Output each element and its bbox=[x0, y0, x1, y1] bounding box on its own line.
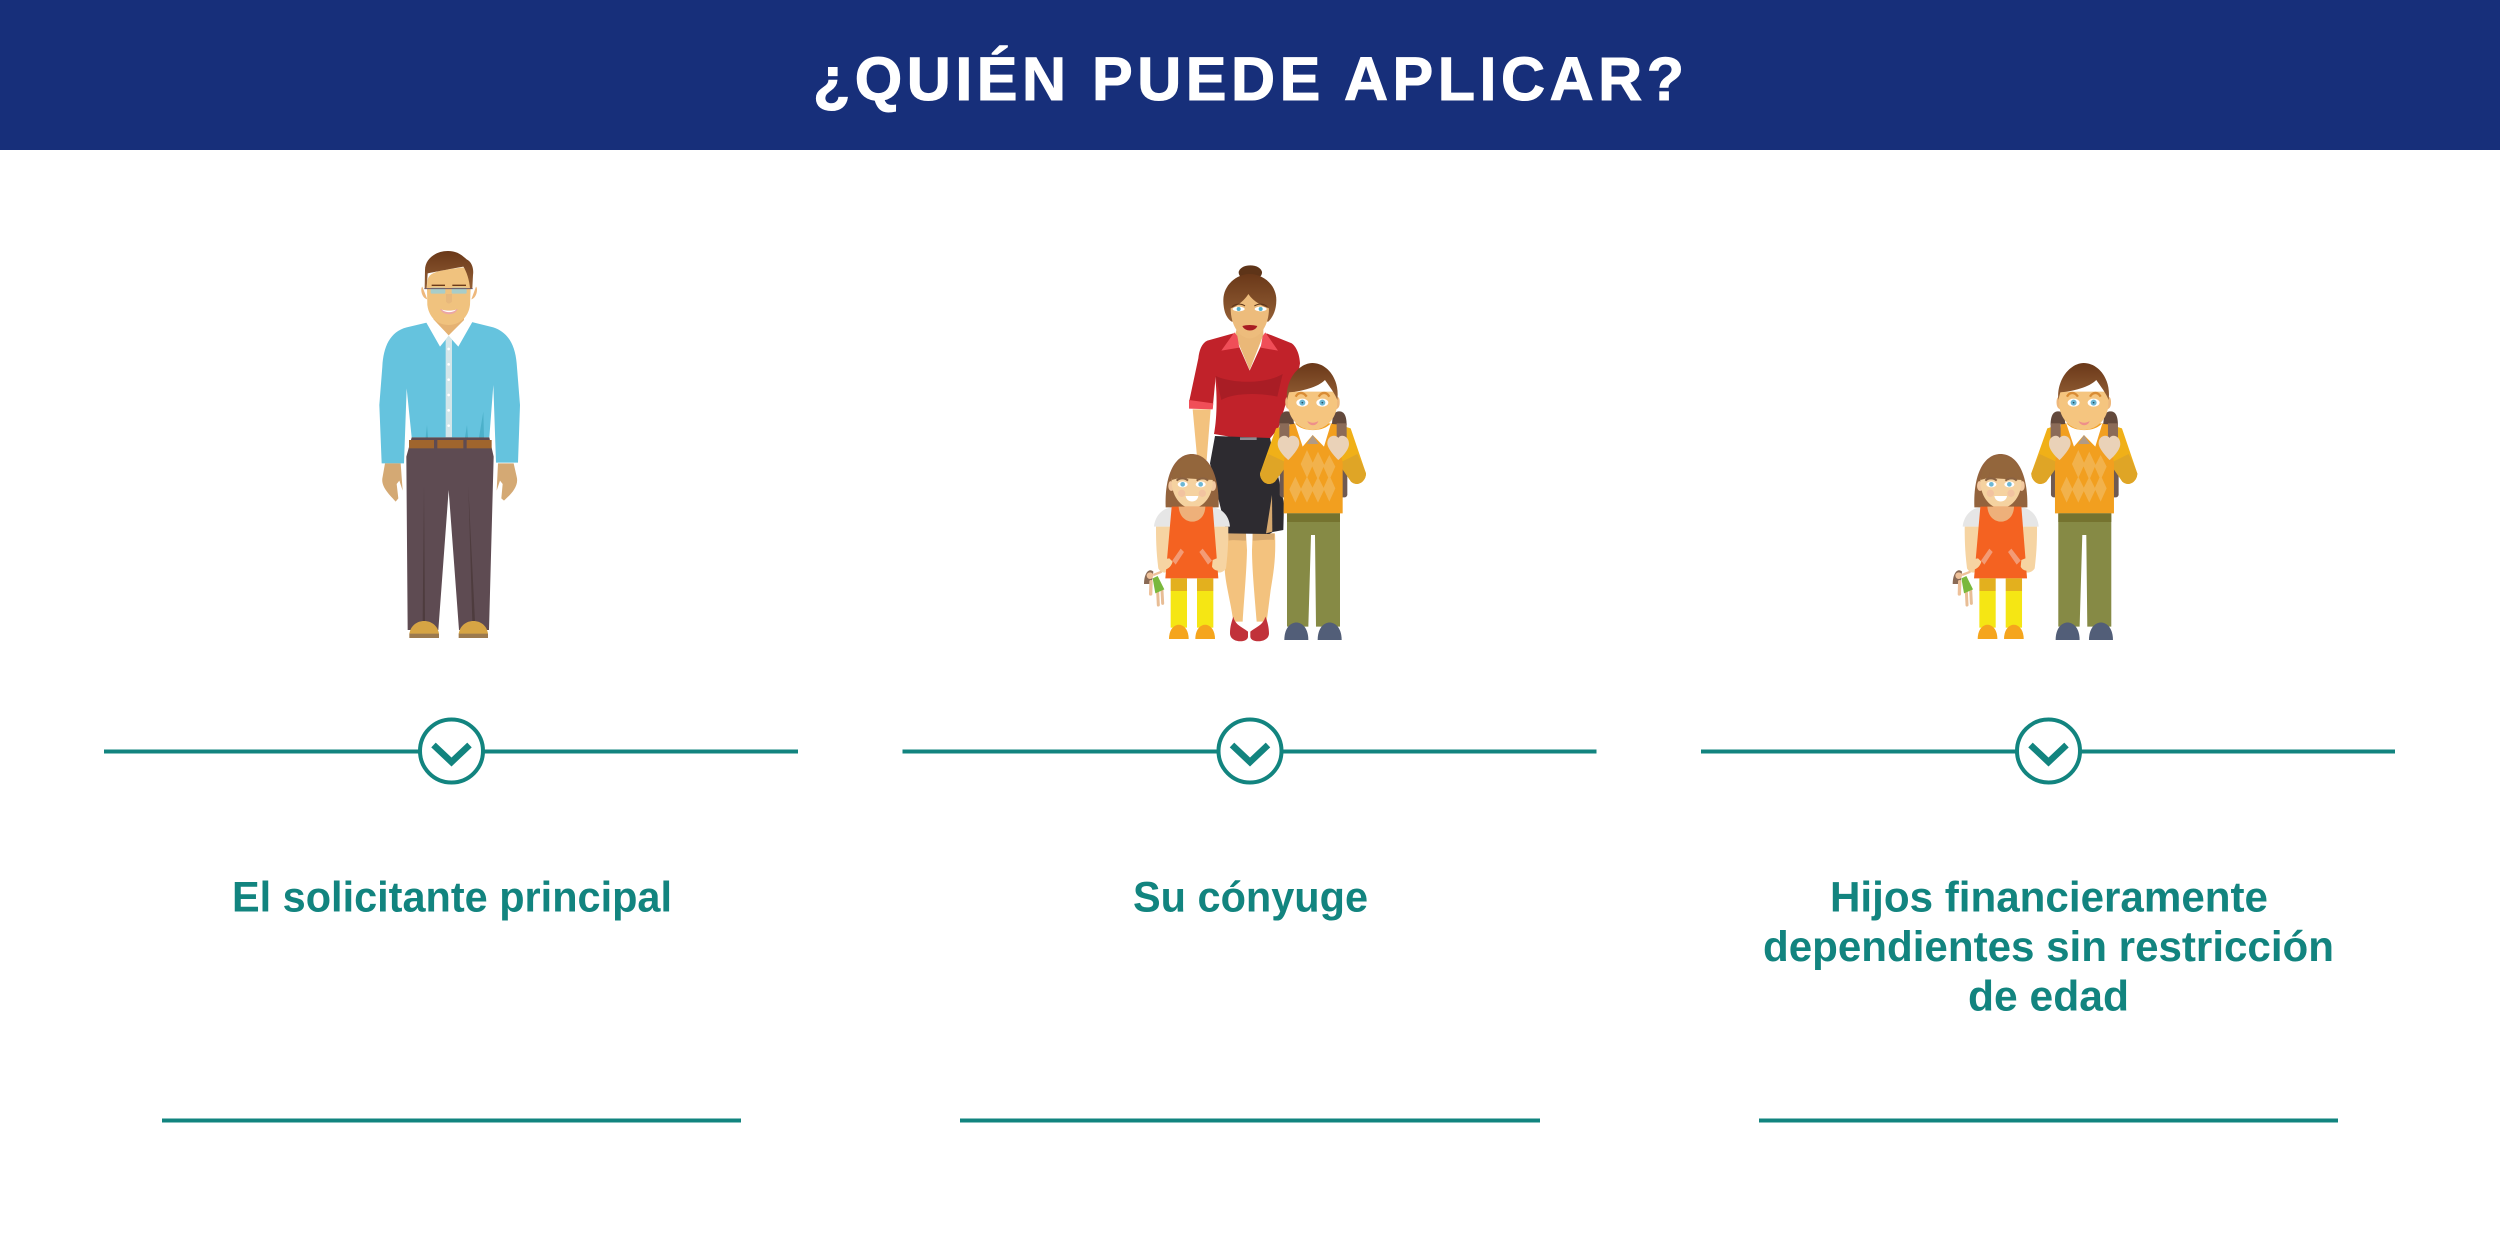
icon: man, principal applicant bbox=[379, 251, 520, 638]
title banner bbox=[0, 0, 2500, 150]
divider with chevron: column 2 bbox=[902, 720, 1596, 782]
bottom rule: column 2 bbox=[960, 1118, 1540, 1122]
boy bbox=[1260, 363, 1366, 640]
woman bbox=[1189, 265, 1300, 641]
label: dependent children: Hijos financieramente bbox=[1830, 874, 2268, 922]
girl bbox=[1144, 454, 1230, 639]
label: principal applicant: El solicitante principal bbox=[232, 874, 672, 922]
divider with chevron: column 1 bbox=[104, 720, 798, 782]
icon: spouse with two children bbox=[1144, 265, 1366, 641]
icon: two children bbox=[1953, 363, 2137, 640]
divider with chevron: column 3 bbox=[1701, 720, 2395, 782]
bottom rule: column 3 bbox=[1759, 1118, 2338, 1122]
boy bbox=[2031, 363, 2137, 640]
label: dependent children bbox=[1763, 874, 2334, 1020]
bottom rule: column 1 bbox=[162, 1118, 741, 1122]
label: dependent children: dependientes sin restricción bbox=[1763, 923, 2334, 971]
title: ¿QUIÉN PUEDE APLICAR? bbox=[813, 45, 1684, 113]
girl bbox=[1953, 454, 2039, 639]
label: dependent children: de edad bbox=[1968, 972, 2129, 1020]
label: spouse: Su cónyuge bbox=[1133, 874, 1368, 922]
